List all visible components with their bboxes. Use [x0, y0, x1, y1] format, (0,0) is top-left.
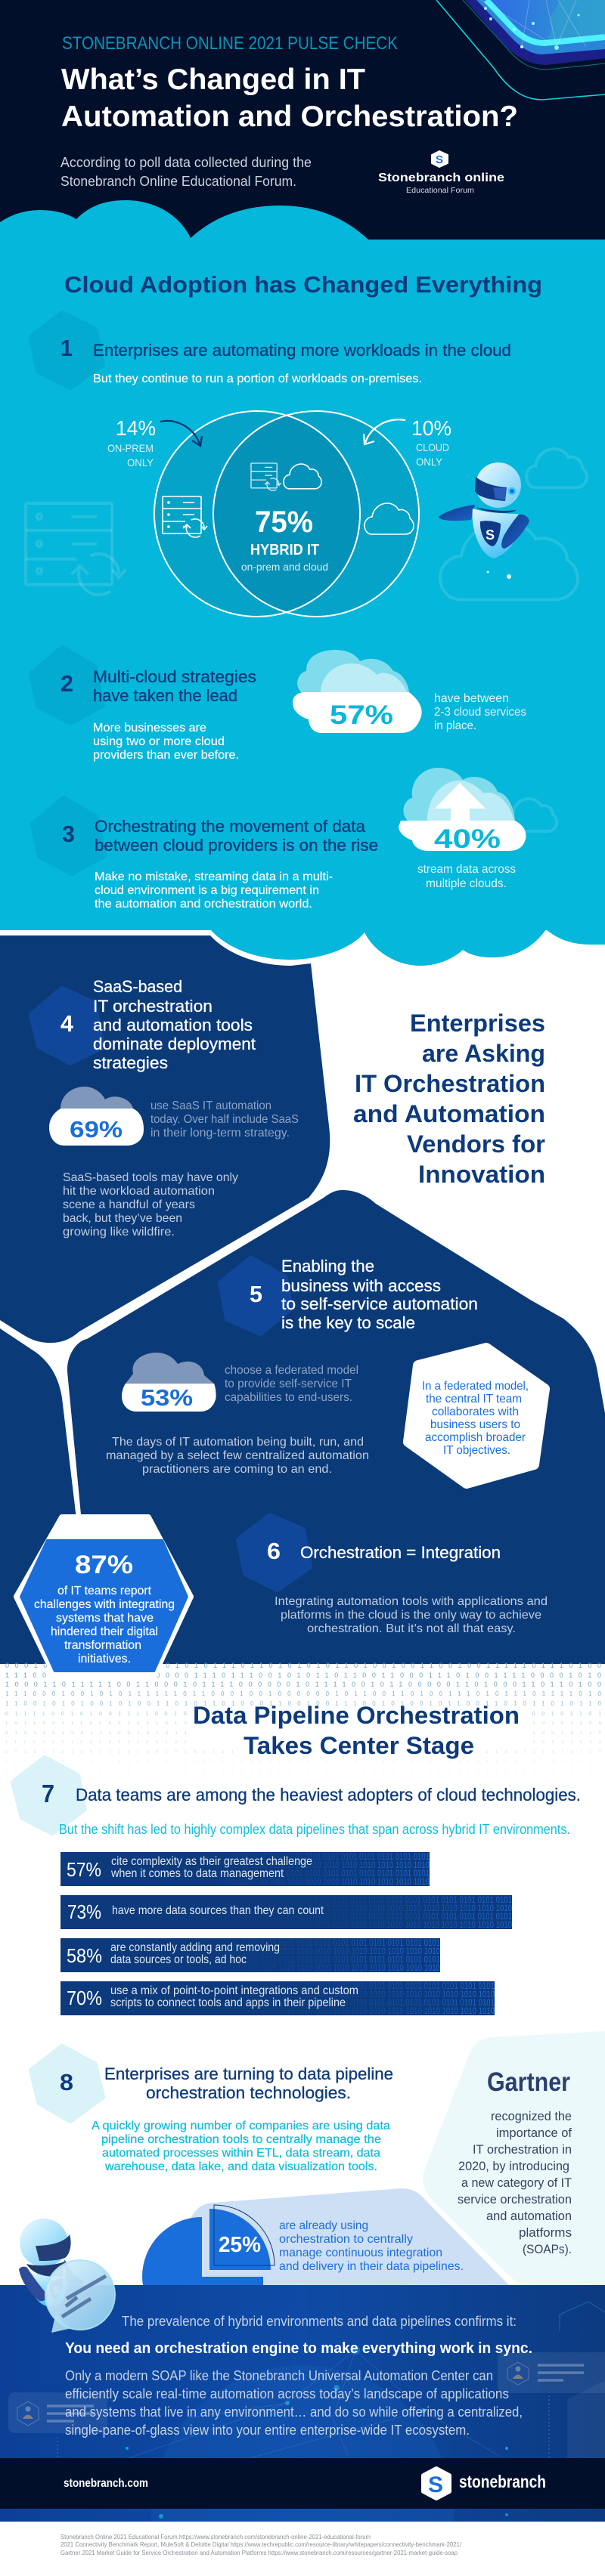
body: automated processes within ETL, data stream, data — [102, 2147, 380, 2160]
body: Only a modern SOAP like the Stonebranch Universal Automation Center can — [65, 2368, 493, 2383]
bar: 70%: use a mix of point-to-point integrations and custom — [110, 1984, 358, 1997]
card: faint profile left — [8, 2392, 107, 2433]
binary pattern background: 0111100101001111001010010110100101100111001011011001110100101101 — [5, 1712, 601, 1717]
callout: 87 percent hexagon: hindered their digital — [51, 1625, 158, 1638]
heading: dominate deployment — [93, 1034, 256, 1053]
heading: Enabling the — [281, 1257, 374, 1276]
stat cloud: 69% — [49, 1087, 144, 1146]
item 8 — [32, 2047, 393, 2173]
bar: 57%: 1010 1010 1010 1010 1010 1010 1010 1010 1010 1010 1010 1010 1010 — [197, 1860, 430, 1870]
bar: 70%: 1010 1010 1010 1010 1010 1010 1010 1010 1010 1010 1010 1010 1010 — [260, 1989, 495, 1999]
bar: 73%: have more data sources than they can count — [112, 1904, 324, 1917]
heading — [93, 977, 256, 1072]
heading: IT orchestration — [93, 997, 213, 1016]
key message: You need an orchestration engine to make everything work in sync. — [65, 2340, 532, 2357]
stat caption: in place. — [434, 719, 476, 732]
navy shape — [67, 1190, 605, 1664]
body — [106, 1436, 369, 1476]
panel: Gartner: Gartner — [487, 2067, 570, 2097]
heading: data pipeline orchestration — [193, 1702, 520, 1759]
icon: on-prem server — [163, 496, 207, 537]
body — [92, 2120, 390, 2173]
callout: 87 percent hexagon: transformation — [64, 1639, 141, 1652]
icon: hybrid server — [251, 463, 281, 490]
binary pattern background: 1110001001010111111011000100100000010110011010011101011101111010 — [5, 1690, 602, 1697]
stat caption — [417, 863, 516, 890]
illustration: robot with speech bubble: S — [53, 2284, 60, 2296]
heading: enterprises asking vendors: Vendors for — [407, 1130, 545, 1158]
bar: 70%: 0101 0101 0101 0101 0101 0101 0101 0101 0101 0101 0101 0101 0101 — [260, 1997, 495, 2008]
binary pattern background: 1011010010110100101100110100101101001011001010110100110101001011 — [30, 1841, 560, 1845]
heading: is the key to scale — [281, 1313, 415, 1332]
logo: Stonebranch Online: S — [436, 153, 443, 166]
bar: 58%: data sources or tools, ad hoc — [110, 1953, 247, 1966]
logo: Stonebranch — [424, 2469, 546, 2498]
stat caption — [434, 692, 526, 732]
callout: federated model: collaborates with — [432, 1406, 519, 1418]
item 1 — [32, 314, 511, 387]
body: Integrating automation tools with applications and — [275, 1595, 548, 1608]
binary pattern background: 0010110100111010010101101001011001101001011010010110100110010110 — [5, 1750, 601, 1755]
intro text — [60, 155, 312, 189]
stat: hybrid IT: HYBRID IT — [250, 542, 319, 558]
bar: 70%: scripts to connect tools and apps in their pipeline — [110, 1996, 346, 2009]
footer bar — [0, 2458, 605, 2509]
panel: Gartner: service orchestration — [458, 2192, 572, 2206]
heading: data pipeline orchestration: Data Pipeline Orchestration — [193, 1702, 520, 1729]
stat: on-prem only: ONLY — [127, 456, 154, 469]
bar: 58%: 0101 0101 0101 0101 0101 0101 0101 0101 0101 0101 0101 0101 0101 — [206, 1937, 440, 1948]
panel: header — [0, 0, 605, 249]
bar: 73%: 0101 0101 0101 0101 0101 0101 0101 0101 0101 0101 0101 0101 0101 — [278, 1894, 512, 1905]
bar: 58% — [60, 1937, 440, 1973]
bar: 73% — [60, 1894, 512, 1930]
panel: Gartner: recognized the — [491, 2109, 572, 2123]
lead text: The prevalence of hybrid environments and data pipelines confirms it: — [122, 2314, 517, 2329]
hexagon — [14, 1758, 84, 1832]
stat caption: to provide self-service IT — [225, 1378, 352, 1390]
body — [95, 871, 333, 911]
stat: hybrid IT — [241, 506, 328, 573]
body: hit the workload automation — [63, 1185, 215, 1198]
logo: Stonebranch Online — [378, 151, 504, 195]
stat: cloud only: 10% — [411, 416, 451, 440]
heading: Orchestrating the movement of data — [95, 817, 366, 836]
body: SaaS-based tools may have only — [63, 1171, 238, 1184]
heading — [281, 1257, 478, 1332]
venn diagram — [154, 411, 419, 617]
title: Automation and Orchestration? — [61, 101, 518, 133]
binary pattern background: 0101100101101001011010011010010110011010010110100101101001100101 — [5, 1854, 602, 1858]
stat caption: stream data across — [417, 863, 516, 876]
body: growing like wildfire. — [63, 1226, 175, 1239]
arrow: on-prem — [160, 421, 202, 446]
stat caption: in their long-term strategy. — [150, 1127, 290, 1140]
body: practitioners are coming to an end. — [142, 1463, 332, 1476]
panel: cloud adoption — [0, 200, 605, 930]
body: back, but they’ve been — [63, 1212, 182, 1225]
panel: Gartner — [423, 2031, 605, 2285]
stat caption: use SaaS IT automation — [150, 1099, 271, 1112]
hexagon — [33, 799, 104, 873]
heading: Data teams are among the heaviest adopters of cloud technologies. — [76, 1785, 581, 1804]
stat caption: 2-3 cloud services — [434, 706, 526, 719]
bar: 73%: 0101 0101 0101 0101 0101 0101 0101 0101 0101 0101 0101 0101 0101 — [278, 1911, 512, 1922]
bar: 57%: 0101 0101 0101 0101 0101 0101 0101 0101 0101 0101 0101 0101 0101 — [197, 1851, 430, 1862]
binary pattern background: 1000110111110011000101111000000101111001011000001101000110110100 — [5, 1681, 601, 1688]
callout: 87 percent hexagon: of IT teams report — [57, 1585, 152, 1597]
website: stonebranch.com — [64, 2477, 148, 2490]
body: orchestration. But it’s not all that easy. — [307, 1622, 516, 1635]
bar: 58%: 0101 0101 0101 0101 0101 0101 0101 0101 0101 0101 0101 0101 0101 — [206, 1954, 440, 1965]
bar: 57%: when it comes to data management — [110, 1867, 284, 1880]
bar: 58%: 1010 1010 1010 1010 1010 1010 1010 1010 1010 1010 1010 1010 1010 — [206, 1962, 440, 1973]
heading backdrop — [188, 1709, 526, 1759]
stat cloud: 40%: 40% — [434, 824, 501, 854]
heading: business with access — [281, 1276, 441, 1295]
body: platforms in the cloud is the only way to achieve — [281, 1609, 541, 1622]
callout: 87 percent hexagon: 87% — [75, 1551, 133, 1579]
body: efficiently scale real-time automation across today’s landscape of applications — [65, 2386, 509, 2401]
navy shape — [0, 935, 330, 1343]
heading — [95, 817, 378, 855]
stat: hybrid IT: 75% — [255, 506, 313, 539]
heading: enterprises asking vendors: IT Orchestration — [355, 1070, 545, 1097]
number: 1 — [60, 335, 73, 361]
hexagon — [239, 1516, 309, 1589]
callout: federated model: IT objectives. — [443, 1444, 510, 1457]
illustration: robot — [439, 462, 529, 579]
binary pattern background: 1110010110100110010101101001110100101101011001011010010110011010 — [5, 1740, 601, 1745]
caption: are already using — [279, 2219, 368, 2232]
heading: Enterprises are automating more workloads in the cloud — [93, 341, 511, 360]
item 2 — [32, 648, 526, 762]
panel: Gartner: IT orchestration in — [473, 2142, 572, 2157]
number: 8 — [60, 2069, 73, 2095]
heading: enterprises asking vendors: and Automation — [353, 1100, 545, 1127]
bar: 58%: 1010 1010 1010 1010 1010 1010 1010 1010 1010 1010 1010 1010 1010 — [206, 1946, 440, 1956]
heading: enterprises asking vendors: Enterprises — [410, 1010, 545, 1037]
intro text: Stonebranch Online Educational Forum. — [60, 174, 296, 189]
icon: cloud — [365, 503, 414, 534]
number: 2 — [60, 670, 73, 697]
binary pattern background: 1100101010010100110101101000110010011100101001011001101011010110 — [5, 1700, 602, 1707]
callout: federated model: the central IT team — [426, 1393, 522, 1406]
body: A quickly growing number of companies are using data — [92, 2120, 390, 2132]
hexagon — [221, 1259, 290, 1333]
bar: 70%: 70% — [67, 1987, 102, 2009]
bar: 57%: cite complexity as their greatest challenge — [111, 1855, 312, 1868]
heading: have taken the lead — [93, 686, 237, 705]
number: 3 — [62, 821, 75, 847]
card: faint profile right — [498, 2352, 605, 2393]
bar: 70%: 0101 0101 0101 0101 0101 0101 0101 0101 0101 0101 0101 0101 0101 — [260, 1981, 495, 1991]
cloud edge hanging over the navy section — [210, 928, 605, 966]
callout: federated model — [408, 1348, 544, 1483]
heading — [104, 2064, 393, 2102]
heading: enterprises asking vendors — [353, 1010, 545, 1188]
heading: enterprises asking vendors: are Asking — [422, 1040, 545, 1067]
caption: and delivery in their data pipelines. — [279, 2260, 464, 2273]
panel: federated model and integration — [67, 1190, 605, 1664]
logo: Stonebranch: S — [428, 2472, 443, 2497]
panel: SaaS orchestration — [0, 935, 330, 1343]
body: The days of IT automation being built, run, and — [112, 1436, 364, 1449]
body — [275, 1595, 548, 1635]
stat: cloud only — [411, 416, 451, 468]
binary pattern background: 1011010010110100101100110100101101001011001010110100110101001011 — [5, 1759, 602, 1763]
references: Stonebranch Online 2021 Educational Forum https://www.stonebranch.com/stonebranch-online-2021-educational-forum — [60, 2533, 371, 2540]
number: 6 — [267, 1538, 281, 1564]
heading: between cloud providers is on the rise — [95, 836, 378, 855]
binary pattern background — [5, 1662, 602, 1858]
stat cloud: 57% — [293, 650, 422, 733]
stat cloud: 40% — [399, 768, 526, 854]
body: the automation and orchestration world. — [95, 898, 312, 911]
panel: conclusion — [0, 2285, 605, 2522]
body — [63, 1171, 238, 1239]
body: and systems that live in any environment… and do so while offering a centralized, — [65, 2404, 523, 2420]
heading: orchestration technologies. — [146, 2083, 351, 2102]
illustration: robot: S — [486, 527, 495, 543]
caption: orchestration to centrally — [279, 2233, 413, 2246]
callout: federated model: In a federated model, — [422, 1380, 529, 1393]
body: Make no mistake, streaming data in a multi- — [95, 871, 333, 883]
stat: cloud only: CLOUD — [416, 441, 449, 453]
stat: on-prem only: ON-PREM — [107, 442, 154, 454]
stat caption: have between — [434, 692, 509, 705]
references: 2021 Connectivity Benchmark Report, MuleSoft & Deloitte Digital https://www.techrepublic.com/resource-library/whitepapers/connectivity-benchmark-2021/ — [60, 2540, 462, 2548]
binary pattern background: 0101100101101001011010011010010110011010010110100101101001100101 — [5, 1769, 602, 1773]
heading: Multi-cloud strategies — [93, 667, 256, 686]
stat caption — [150, 1099, 299, 1140]
bar: 57%: 57% — [67, 1858, 101, 1881]
bar: 57%: 1010 1010 1010 1010 1010 1010 1010 1010 1010 1010 1010 1010 1010 — [197, 1876, 430, 1887]
heading: data pipeline orchestration: Takes Center Stage — [244, 1732, 474, 1759]
pie chart — [142, 2205, 275, 2285]
heading: Cloud Adoption has Changed Everything — [64, 271, 542, 298]
stat: on-prem only: 14% — [116, 416, 156, 440]
references: Gartner 2021 Market Guide for Service Orchestration and Automation Platforms https://www.stonebranch.com/resources/gartner-2021-market-guide-soap — [60, 2549, 458, 2556]
callout: 87 percent hexagon: systems that have — [56, 1612, 154, 1625]
callout: 87 percent hexagon: challenges with integrating — [34, 1598, 175, 1611]
stat cloud: 57%: 57% — [330, 700, 393, 730]
bar: 70%: 1010 1010 1010 1010 1010 1010 1010 1010 1010 1010 1010 1010 1010 — [260, 2005, 495, 2016]
heading: Enterprises are turning to data pipeline — [104, 2064, 393, 2083]
stat cloud: 53%: 53% — [141, 1384, 193, 1411]
icon: hybrid cloud — [284, 464, 321, 489]
binary pattern background: 0101101001110010101100111010010110010110100111001010011010010110 — [5, 1731, 602, 1736]
hexagon — [32, 989, 102, 1062]
intro text: According to poll data collected during the — [60, 155, 312, 170]
body: single-pane-of-glass view into your entire enterprise-wide IT ecosystem. — [65, 2423, 470, 2438]
bar: 58%: 58% — [67, 1944, 102, 1967]
stat caption: choose a federated model — [225, 1364, 358, 1377]
callout: federated model: business users to — [430, 1418, 520, 1431]
panel: 25 percent pie — [142, 2188, 509, 2285]
stat caption: capabilities to end-users. — [225, 1391, 352, 1404]
panel: Gartner: platforms — [519, 2225, 572, 2240]
arrow: cloud — [364, 419, 405, 444]
title — [61, 63, 518, 133]
heading: enterprises asking vendors: Innovation — [418, 1161, 545, 1188]
hexagon — [32, 314, 102, 387]
heading: strategies — [93, 1053, 168, 1072]
illustration: tilted screen in the corner — [436, 0, 605, 100]
body — [93, 722, 239, 762]
bar: 73%: 1010 1010 1010 1010 1010 1010 1010 1010 1010 1010 1010 1010 1010 — [278, 1903, 512, 1913]
caption — [279, 2219, 464, 2273]
illustration: robot with speech bubble — [19, 2219, 115, 2333]
stat caption: multiple clouds. — [426, 877, 507, 890]
number: 4 — [60, 1010, 74, 1037]
bar: 73%: 73% — [67, 1900, 101, 1923]
bar: 73%: 1010 1010 1010 1010 1010 1010 1010 1010 1010 1010 1010 1010 1010 — [278, 1919, 512, 1930]
number: 5 — [250, 1281, 262, 1307]
callout: federated model: accomplish broader — [425, 1431, 526, 1444]
item 7 — [14, 1758, 581, 1837]
stat: on-prem only — [107, 416, 156, 469]
logo: Stonebranch Online: Educational Forum — [406, 186, 474, 195]
item 3 — [33, 768, 526, 911]
number: 7 — [42, 1780, 54, 1808]
references — [60, 2533, 462, 2556]
body: providers than ever before. — [93, 749, 239, 762]
subheading: But they continue to run a portion of workloads on-premises. — [93, 373, 422, 385]
callout: 87 percent hexagon — [17, 1517, 191, 1675]
body: warehouse, data lake, and data visualization tools. — [104, 2160, 377, 2173]
stat: cloud only: ONLY — [416, 456, 443, 468]
pie chart: 25% — [219, 2233, 261, 2257]
body: using two or more cloud — [93, 735, 225, 748]
body: managed by a select few centralized automation — [106, 1449, 369, 1462]
stat cloud: 53% — [122, 1353, 216, 1412]
callout: 87 percent hexagon: initiatives. — [78, 1653, 131, 1665]
panel: Gartner: importance of — [496, 2126, 572, 2140]
stat caption — [225, 1364, 358, 1404]
heading — [93, 667, 256, 705]
background network globe — [57, 2302, 605, 2522]
kicker: STONEBRANCH ONLINE 2021 PULSE CHECK — [62, 33, 398, 54]
body: More businesses are — [93, 722, 206, 734]
decorative icons: faint server and clouds — [26, 449, 587, 831]
heading: Orchestration = Integration — [300, 1543, 501, 1562]
stat caption: today. Over half include SaaS — [150, 1113, 299, 1126]
logo: Stonebranch: stonebranch — [459, 2472, 546, 2491]
title: What’s Changed in IT — [61, 63, 365, 96]
cloud edge background — [0, 200, 605, 930]
stat: hybrid IT: on-prem and cloud — [241, 561, 328, 573]
body — [65, 2368, 523, 2438]
hexagon — [32, 648, 102, 722]
panel: Gartner: 2020, by introducing — [458, 2159, 569, 2173]
bar: 70% — [60, 1981, 495, 2016]
binary pattern background: 1110001100101010000011101110010101101100110001110100111100001010 — [5, 1671, 601, 1679]
body: scene a handful of years — [63, 1198, 195, 1211]
body: pipeline orchestration tools to centrally manage the — [101, 2133, 381, 2146]
shape: lower left navy sliver — [0, 1328, 76, 1664]
binary pattern background: 1011001110100101101001011010011100101001100101101001110010101100 — [5, 1721, 602, 1726]
stat cloud: 69%: 69% — [70, 1116, 123, 1143]
caption: manage continuous integration — [279, 2247, 442, 2259]
body: cloud environment is a big requirement in — [95, 884, 319, 897]
panel: Gartner: (SOAPs). — [523, 2242, 572, 2256]
bar: 57% — [60, 1851, 430, 1887]
heading: to self-service automation — [281, 1294, 478, 1313]
logo: Stonebranch Online: Stonebranch online — [378, 172, 504, 184]
bar: 57%: 0101 0101 0101 0101 0101 0101 0101 0101 0101 0101 0101 0101 0101 — [197, 1868, 430, 1879]
bar: 58%: are constantly adding and removing — [110, 1941, 280, 1954]
heading: and automation tools — [93, 1016, 253, 1034]
hexagon — [32, 2047, 102, 2120]
heading: SaaS-based — [93, 977, 182, 996]
panel: Gartner: a new category of IT — [461, 2176, 572, 2190]
binary pattern background: 0001010011010110001010111011010101011010010011001001111101110100 — [5, 1662, 601, 1669]
panel: Gartner: and automation — [486, 2209, 572, 2223]
